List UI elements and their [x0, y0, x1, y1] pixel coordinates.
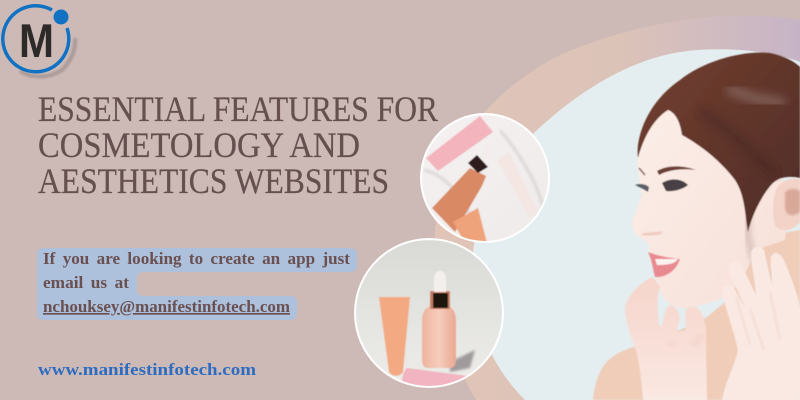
logo ring	[3, 6, 69, 72]
glass bottle	[422, 307, 456, 368]
right hand	[722, 247, 800, 400]
orange bottle	[432, 168, 486, 232]
white cloth	[420, 113, 550, 243]
hair	[638, 52, 800, 232]
eyebrow	[657, 166, 696, 175]
title line 1: ESSENTIAL FEATURES FOR	[38, 89, 438, 129]
photo top frame	[420, 113, 550, 243]
ear	[773, 178, 800, 230]
callout highlight	[37, 248, 357, 320]
bottle collar	[430, 291, 450, 309]
title line 3: AESTHETICS WEBSITES	[38, 161, 389, 201]
logo	[3, 6, 75, 77]
photo bottom frame	[354, 238, 504, 388]
peach ring	[435, 15, 800, 400]
neck shading	[747, 215, 770, 280]
left finger shade	[668, 334, 703, 346]
product photo circle bottom	[354, 238, 505, 392]
mouth	[648, 252, 680, 277]
pink tube	[426, 116, 493, 171]
shadow	[450, 350, 475, 372]
title	[38, 89, 438, 201]
cloth folds	[424, 130, 544, 214]
peach tube	[379, 297, 410, 376]
black cap	[433, 293, 448, 308]
far eye	[635, 184, 649, 192]
hair highlight	[728, 88, 785, 103]
nose shading	[642, 232, 662, 235]
eyebrow far	[639, 168, 645, 175]
eye	[662, 179, 688, 191]
teeth	[655, 259, 678, 265]
callout line 2: email us at	[43, 273, 130, 292]
dropper	[481, 145, 493, 160]
inner ear	[785, 189, 800, 215]
orange tube	[453, 208, 487, 243]
left hand	[625, 277, 707, 400]
logo shadow	[20, 38, 75, 77]
bottle cap	[468, 155, 488, 173]
face	[633, 100, 790, 308]
callout email: nchouksey@manifestinfotech.com	[43, 297, 290, 316]
white tube	[498, 154, 527, 198]
callout text	[43, 249, 351, 316]
pink tube lying	[402, 368, 466, 386]
hair shadow	[700, 110, 775, 175]
white dropper	[434, 271, 446, 292]
woman portrait	[593, 52, 800, 400]
grey wall	[355, 240, 505, 390]
right finger shade	[736, 292, 780, 350]
logo dot	[54, 10, 68, 24]
title line 2: COSMETOLOGY AND	[38, 125, 360, 165]
shoulders and neck	[593, 230, 800, 400]
light blue circle	[472, 49, 800, 400]
website link: www.manifestinfotech.com	[38, 360, 256, 379]
logo letter: M	[19, 14, 54, 67]
product photo circle top	[420, 113, 550, 243]
callout line 1: If you are looking to create an app just	[43, 249, 351, 268]
